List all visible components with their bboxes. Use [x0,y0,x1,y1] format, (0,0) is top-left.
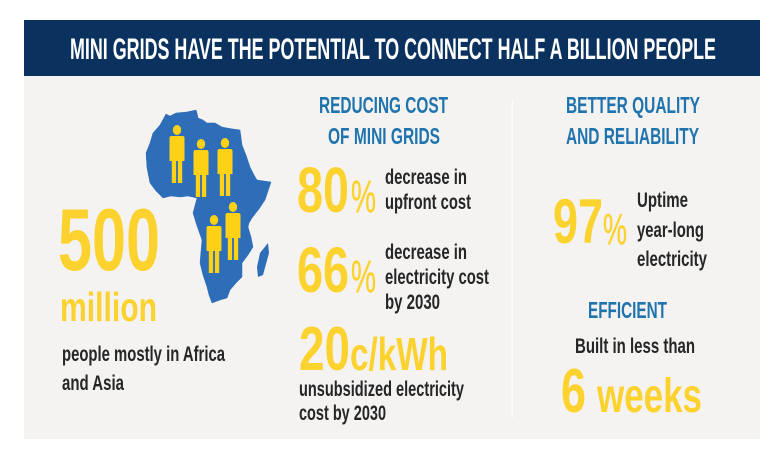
heading: efficient: EFFICIENT [588,297,667,323]
icon: map of Africa with people [146,110,271,303]
stat: 6 weeks: weeks [596,370,702,423]
stat: 66% decrease in electricity cost [297,234,489,314]
stat: 66% decrease in electricity cost: decrease in [385,240,467,264]
stat: 6 weeks: 6 [561,357,586,426]
stat: 80% decrease in upfront cost: 80 [297,154,349,226]
stat: 20c/kWh unsubsidized electricity cost [299,315,464,425]
stat: 80% decrease in upfront cost [297,154,471,226]
stat: 500 million [58,190,160,330]
stat: 97% uptime: % [603,205,627,254]
stat: 80% decrease in upfront cost: % [351,171,376,222]
stat: 66% decrease in electricity cost: electricity cost [385,265,489,289]
stat: 66% decrease in electricity cost: 66 [297,234,349,306]
stat: 20c/kWh unsubsidized electricity cost: unsubsidized electricity [299,377,464,401]
stat: 80% decrease in upfront cost: decrease in [385,165,467,189]
text: people mostly in Africa and Asia: people mostly in Africa [62,342,226,366]
heading: reducing cost of mini grids [319,92,448,149]
stat: 97% uptime: year-long [637,218,704,242]
stat: 97% uptime [553,187,707,271]
stat: 20c/kWh unsubsidized electricity cost: cost by 2030 [299,401,386,425]
text: people mostly in Africa and Asia: and Asia [62,371,125,395]
heading: better quality and reliability: BETTER QUALITY [566,92,700,118]
stat: 97% uptime: 97 [553,187,603,257]
stat: 80% decrease in upfront cost: upfront cost [385,190,471,214]
stat: 6 weeks [561,357,702,426]
text: people mostly in Africa and Asia [62,342,226,395]
background panel [24,76,760,439]
stat: 66% decrease in electricity cost: by 2030 [385,290,440,314]
stat: 97% uptime: Uptime [637,188,688,212]
title banner [24,20,760,76]
heading: better quality and reliability [566,92,700,149]
stat: 500 million: million [60,284,157,330]
heading: reducing cost of mini grids: REDUCING COST [319,92,448,118]
stat: 66% decrease in electricity cost: % [351,251,376,302]
stat: 20c/kWh unsubsidized electricity cost: c/kWh [350,328,448,380]
stat: 97% uptime: electricity [637,247,707,271]
text: built in less than: Built in less than [575,334,695,358]
heading: reducing cost of mini grids: OF MINI GRIDS [328,123,440,149]
stat: 20c/kWh unsubsidized electricity cost: 20 [299,315,350,384]
heading: better quality and reliability: AND RELIABILITY [566,123,699,149]
stat: 500 million: 500 [58,190,160,289]
